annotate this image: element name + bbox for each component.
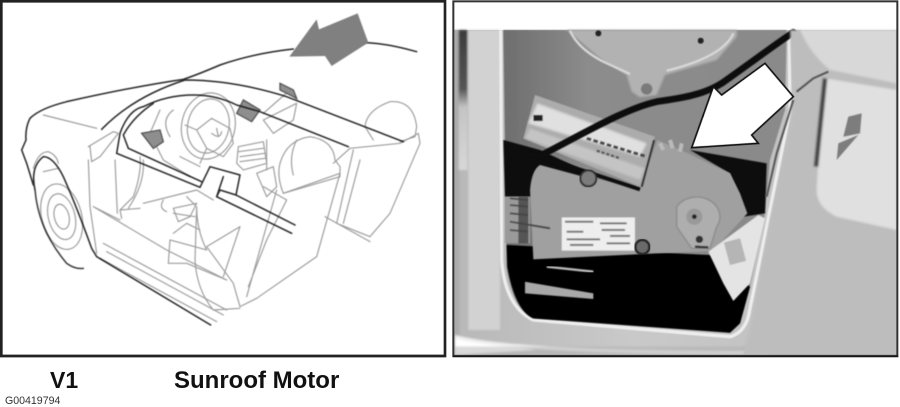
light outline drawing of car interior — [33, 88, 420, 322]
panel: car interior line drawing — [0, 0, 447, 357]
panel: sunroof motor photo — [453, 0, 898, 357]
vents hatch — [142, 83, 297, 148]
photo contents — [454, 30, 897, 355]
trim left side — [454, 30, 895, 355]
gearbox screw — [580, 170, 596, 186]
black wiring harness — [542, 32, 793, 155]
gear disc — [660, 140, 720, 248]
white arrow pointing to motor — [692, 63, 793, 148]
right trim and console — [743, 30, 897, 355]
mounting plate — [567, 30, 737, 97]
figure reference number: G00419794 — [5, 395, 60, 407]
opening rim highlight — [501, 30, 790, 337]
motor cylinder — [523, 95, 655, 189]
black cavity areas — [503, 140, 590, 197]
caption: component name: Sunroof Motor — [174, 367, 339, 394]
connector — [505, 197, 550, 243]
icon: grey arrow pointing to sunroof motor — [289, 13, 368, 66]
gearbox housing — [530, 140, 747, 259]
panel frame — [1, 1, 445, 356]
cavity — [503, 30, 787, 333]
photo frame — [453, 1, 897, 356]
caption: component code: V1 — [50, 367, 78, 393]
label screw — [635, 240, 649, 254]
bold outer body lines — [22, 43, 417, 325]
strip highlights at bottom of cavity — [525, 282, 593, 299]
white tag — [708, 215, 765, 301]
product label — [562, 217, 635, 251]
